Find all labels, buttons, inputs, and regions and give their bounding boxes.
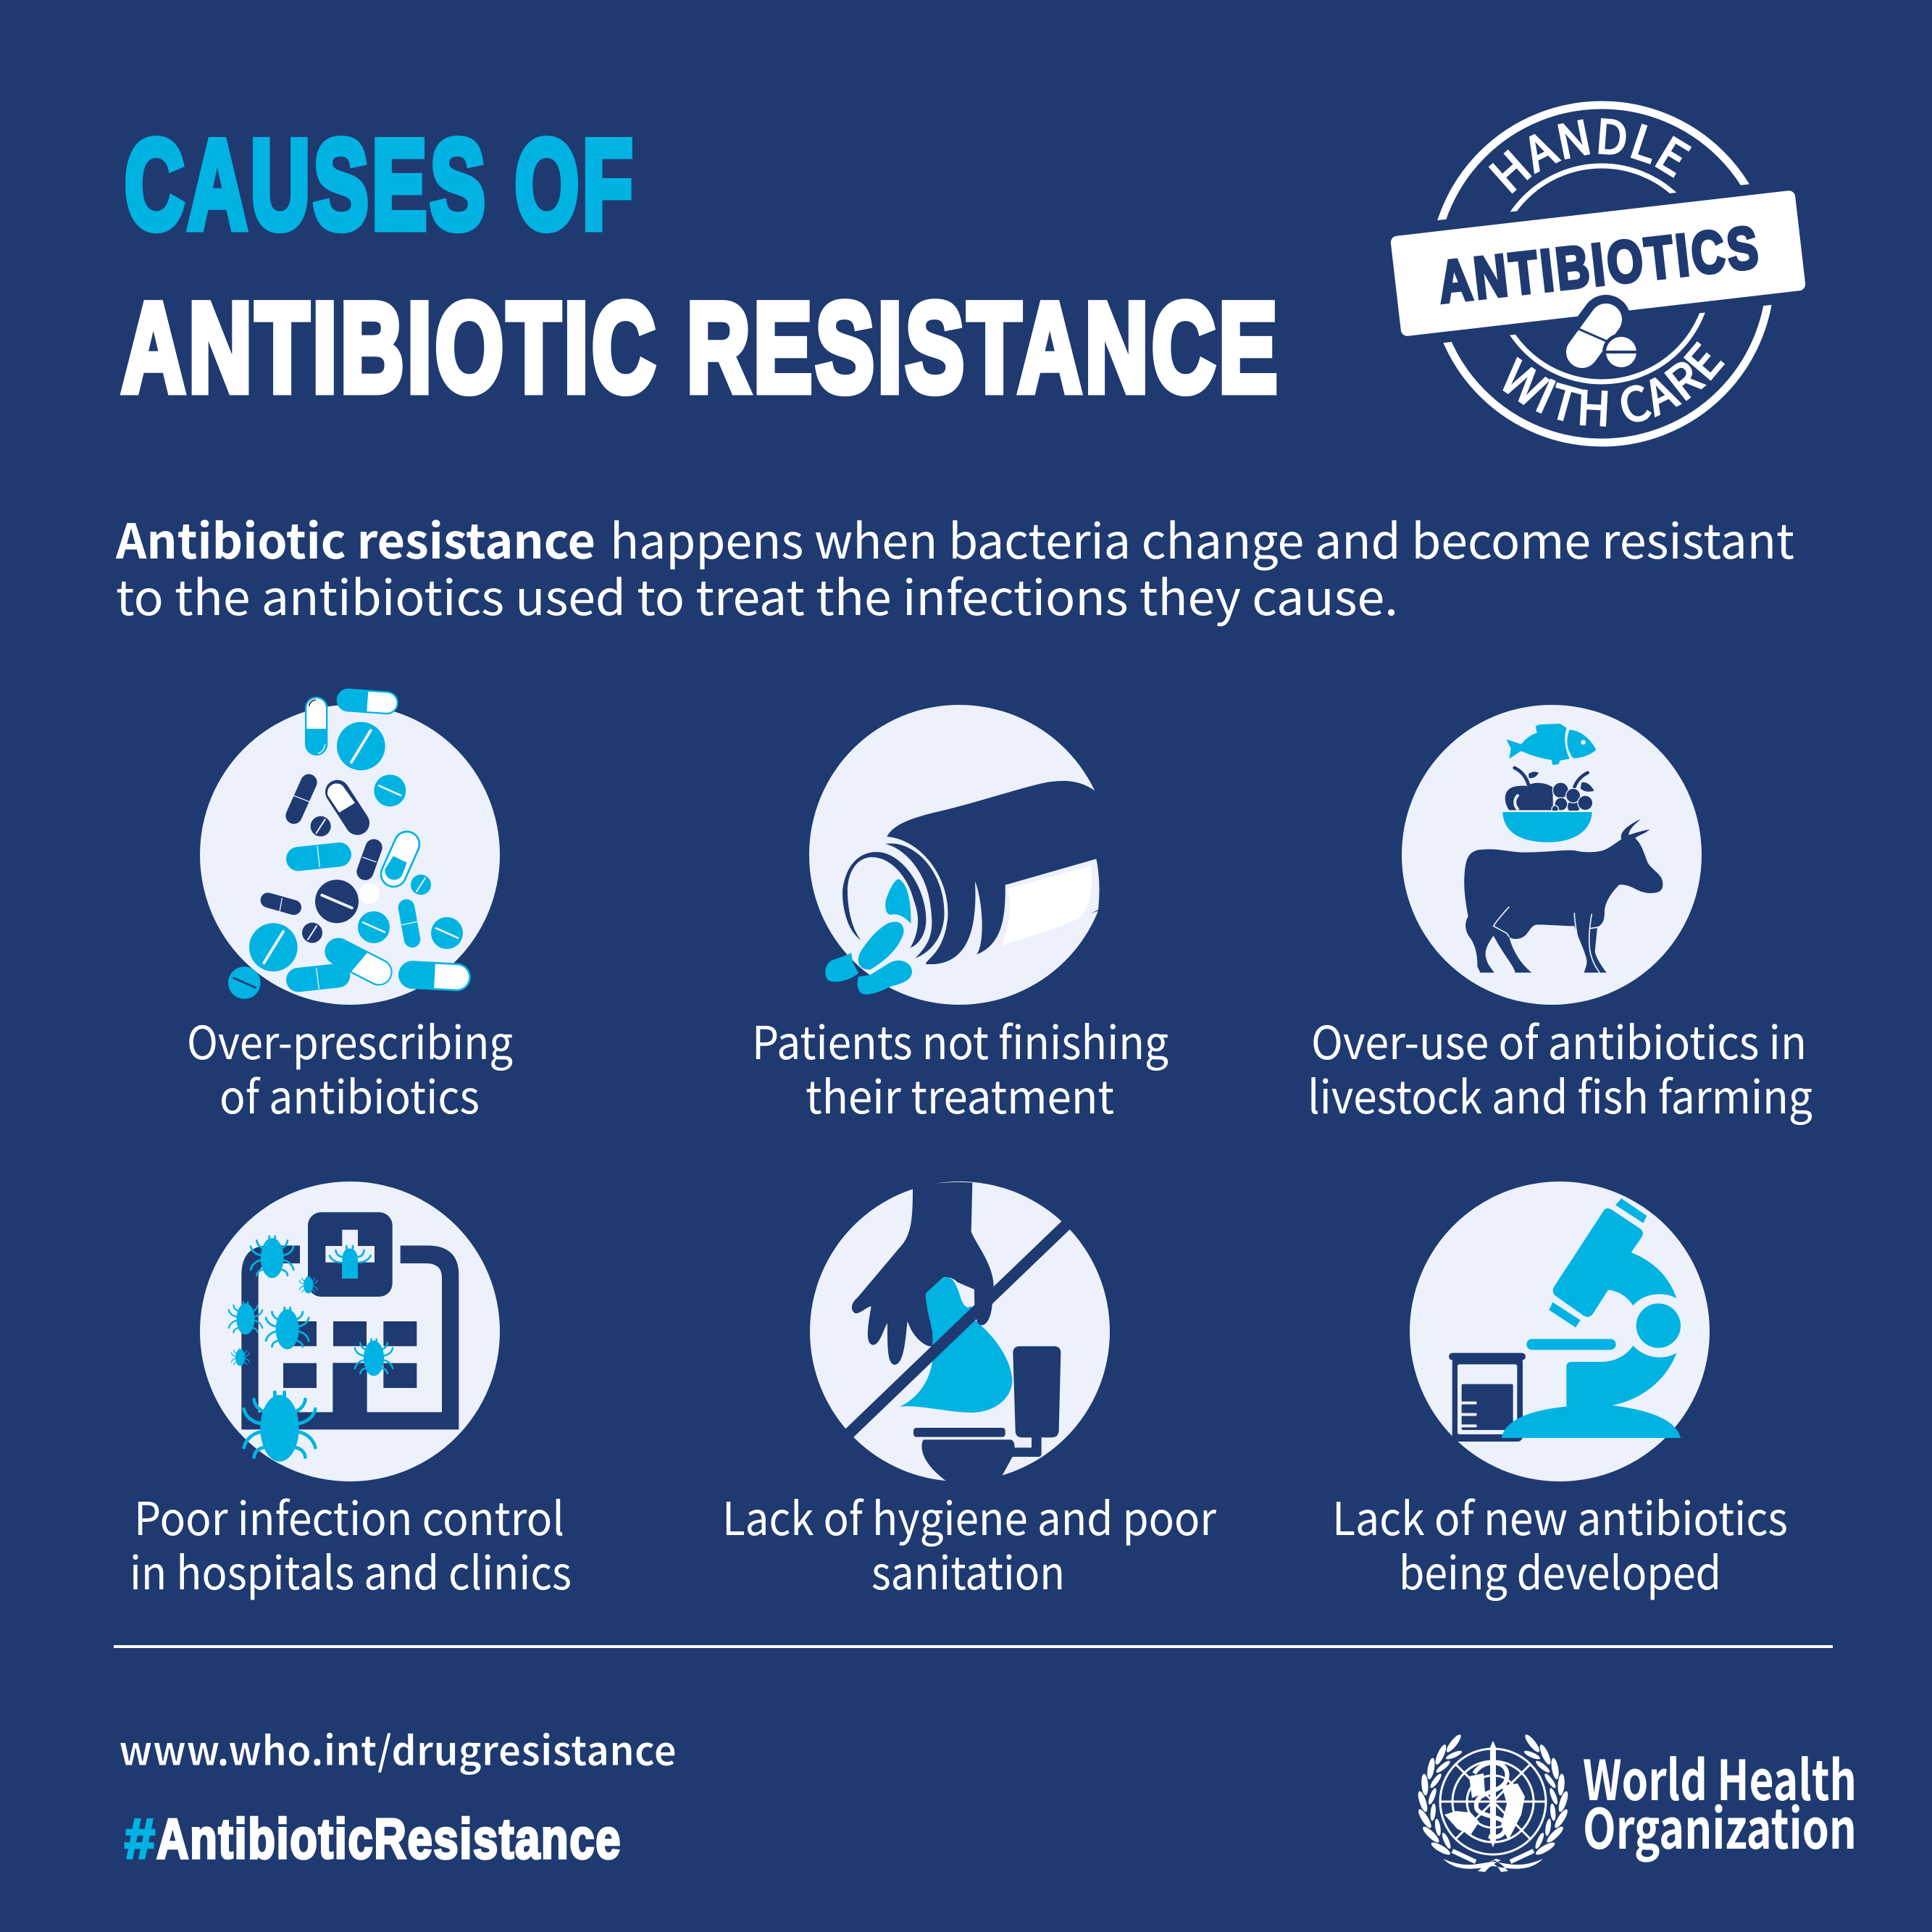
- caption: livestock and fish farming: [1308, 1007, 1812, 1127]
- who wordmark: Organization: [1583, 1785, 1857, 1865]
- panel: poor infection control: [200, 1182, 500, 1481]
- caption: over-prescribing: Over-prescribing: [187, 1007, 513, 1073]
- caption: over-prescribing: [187, 1007, 513, 1127]
- hashtag: #: [125, 1807, 155, 1870]
- icon: fish, fruit bowl and cow: [1464, 724, 1663, 973]
- stamp: handle antibiotics with care: HANDLE: [1488, 118, 1692, 194]
- who wordmark: World Health: [1583, 1736, 1857, 1816]
- caption: lack of hygiene: [722, 1483, 1217, 1603]
- who wordmark: [1583, 1736, 1857, 1865]
- stamp: handle antibiotics with care: ANTIBIOTICS: [1435, 214, 1764, 316]
- caption: patients not finishing: [752, 1007, 1168, 1127]
- stamp: handle antibiotics with care: WITH CARE: [1502, 341, 1726, 427]
- icon: spilled pill bottle: [825, 781, 1132, 995]
- panel: lack of hygiene: [810, 1182, 1110, 1487]
- panel: livestock and fish farming: [1402, 705, 1702, 1005]
- caption: lack of new antibiotics: being developed: [1399, 1537, 1721, 1603]
- icon: beaker and microscope: [1449, 1198, 1681, 1442]
- intro text: to the antibiotics used to treat the infections they cause.: [116, 560, 1398, 630]
- icon: hospital with bacteria: [229, 1212, 459, 1462]
- caption: livestock and fish farming: Over-use of antibiotics in: [1311, 1007, 1807, 1073]
- caption: lack of new antibiotics: Lack of new antibiotics: [1332, 1483, 1788, 1549]
- caption: lack of new antibiotics: [1332, 1483, 1788, 1603]
- website url: www.who.int/drugresistance: [119, 1719, 677, 1778]
- panel: over-prescribing: [200, 687, 500, 1005]
- caption: patients not finishing: Patients not finishing: [752, 1007, 1168, 1073]
- panel: patients not finishing: [809, 705, 1132, 1005]
- intro text: happens when bacteria change and become resistant: [610, 503, 1794, 573]
- panel: lack of new antibiotics: [1410, 1182, 1710, 1481]
- title: antibiotic resistance: ANTIBIOTIC RESISTANCE: [122, 277, 1281, 419]
- icon: hand, bag and toilet crossed out: [833, 1182, 1079, 1487]
- caption: livestock and fish farming: livestock and fish farming: [1308, 1061, 1812, 1127]
- title: causes of: CAUSES OF: [125, 114, 636, 256]
- intro text: Antibiotic resistance: [115, 503, 595, 573]
- intro text: [115, 503, 1794, 630]
- caption: poor infection control: [130, 1483, 572, 1603]
- caption: lack of hygiene: Lack of hygiene and poor: [722, 1483, 1217, 1549]
- caption: patients not finishing: their treatment: [806, 1061, 1114, 1127]
- stamp: handle antibiotics with care: [1391, 101, 1805, 446]
- caption: over-prescribing: of antibiotics: [219, 1061, 480, 1127]
- caption: poor infection control: in hospitals and clinics: [130, 1537, 572, 1603]
- hashtag: AntibioticResistance: [156, 1807, 622, 1870]
- icon: pile of pills: [228, 687, 472, 999]
- caption: lack of hygiene: sanitation: [871, 1537, 1065, 1603]
- who logo emblem: [1416, 1733, 1570, 1872]
- caption: poor infection control: Poor infection control: [134, 1483, 564, 1549]
